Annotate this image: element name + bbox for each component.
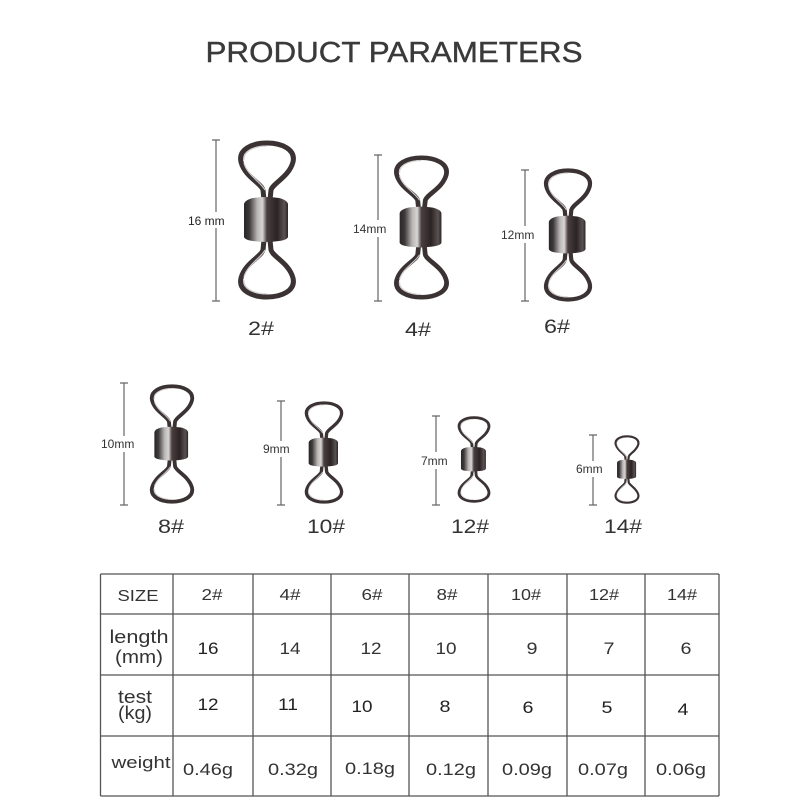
dimension line: 10mm: [120, 383, 128, 505]
row: size: 10#: [511, 587, 541, 604]
dimension label: 14mm: 14mm: [353, 222, 386, 236]
dimension label: 10mm: 10mm: [101, 437, 134, 451]
row: size: 2#: [202, 587, 223, 604]
swivel group: size 2#: [188, 140, 293, 340]
size label: 14#: 14#: [604, 517, 643, 538]
row: size: 8#: [436, 587, 458, 604]
icon: swivel 12#: [459, 418, 489, 501]
dimension label: 6mm: 6mm: [576, 462, 603, 476]
row: weight: 0.09g: [502, 760, 552, 779]
dimension label: 9mm: 9mm: [263, 442, 290, 456]
row: test: 12: [198, 695, 218, 714]
swivel group: size 14#: [576, 435, 643, 538]
row: length: length: [110, 627, 168, 647]
row: test: 11: [278, 695, 298, 714]
size label: 4#: 4#: [405, 320, 432, 341]
dimension line: 9mm: [277, 401, 285, 505]
row: size: 14#: [667, 587, 697, 604]
parameter table: [100, 574, 719, 796]
row: test: 6: [522, 698, 534, 717]
size label: 2#: 2#: [248, 319, 275, 340]
row: length: 14: [280, 639, 300, 658]
icon: swivel 8#: [152, 386, 192, 502]
row: size: SIZE: [118, 588, 158, 605]
size label: 12#: 12#: [451, 517, 490, 538]
row: size: 6#: [362, 587, 383, 604]
row: test: 8: [440, 697, 450, 716]
row: test: test: [118, 687, 152, 707]
icon: swivel 2#: [241, 143, 293, 297]
row: weight: 0.46g: [183, 760, 233, 779]
icon: swivel 14#: [616, 436, 638, 503]
row: weight: 0.32g: [268, 760, 318, 779]
row: size: 12#: [589, 587, 619, 604]
row: length: 16: [198, 639, 218, 658]
dimension line: 7mm: [432, 416, 440, 505]
size label: 6#: 6#: [544, 317, 571, 338]
row: weight: 0.18g: [345, 759, 395, 778]
row: length: 10: [436, 639, 456, 658]
dimension line: 12mm: [521, 170, 529, 301]
title: PRODUCT PARAMETERS: [206, 37, 582, 69]
size label: 8#: 8#: [158, 517, 185, 538]
size label: 10#: 10#: [307, 517, 346, 538]
row: test: (kg): [118, 703, 152, 723]
dimension line: 16 mm: [212, 140, 220, 301]
row: weight: weight: [110, 753, 171, 772]
row: length: 9: [526, 639, 538, 658]
dimension label: 12mm: 12mm: [501, 228, 534, 242]
row: length: 6: [680, 639, 692, 658]
row: test: [118, 687, 688, 723]
row: length: 7: [604, 639, 614, 658]
row: size: 4#: [280, 587, 301, 604]
swivel group: size 10#: [263, 401, 346, 538]
icon: swivel 10#: [306, 403, 342, 502]
row: weight: 0.07g: [578, 760, 628, 779]
swivel group: size 8#: [101, 383, 192, 538]
icon: swivel 4#: [396, 158, 447, 297]
dimension label: 7mm: 7mm: [421, 454, 448, 468]
row: length: 12: [360, 639, 382, 658]
row: test: 4: [678, 700, 688, 719]
dimension line: 6mm: [589, 435, 597, 505]
row: weight: 0.06g: [656, 760, 706, 779]
row: weight: [110, 753, 706, 779]
row: weight: 0.12g: [426, 760, 476, 779]
swivel group: size 6#: [501, 170, 590, 338]
dimension line: 14mm: [374, 155, 382, 301]
icon: swivel 6#: [546, 171, 590, 299]
swivel group: size 12#: [421, 416, 490, 538]
dimension label: 16 mm: 16 mm: [188, 214, 225, 228]
row: length: [110, 627, 692, 667]
row: size: [118, 587, 697, 605]
row: length: (mm): [115, 647, 163, 667]
row: test: 10: [352, 697, 372, 716]
row: test: 5: [602, 698, 612, 717]
table grid: [100, 574, 719, 796]
swivel group: size 4#: [353, 155, 447, 341]
